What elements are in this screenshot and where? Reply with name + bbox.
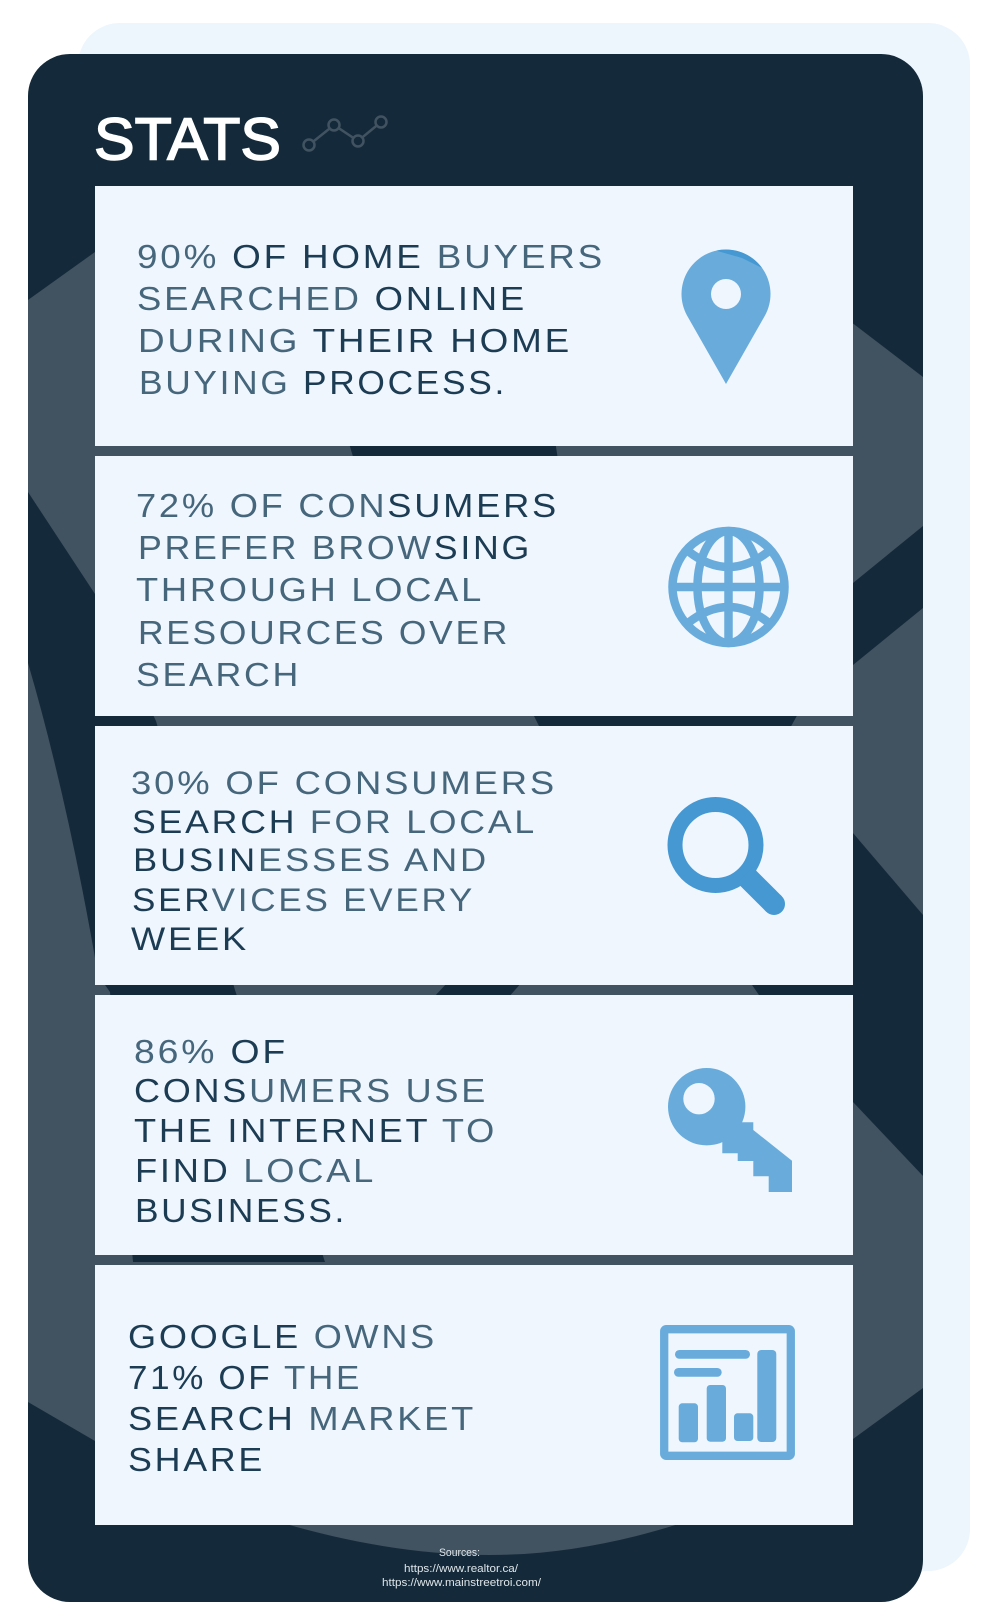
stat text: SEARCH (136, 656, 301, 693)
stat text: 90% OF HOME BUYERS (137, 238, 605, 275)
stat text: SEARCH FOR LOCAL (132, 804, 537, 840)
stat text: CONS UMERS USE (134, 1072, 488, 1109)
stat text (137, 238, 605, 401)
panel background (95, 1265, 853, 1525)
panel background (95, 726, 853, 985)
panel background (95, 995, 853, 1255)
icon: magnifying glass (675, 804, 780, 910)
stat text: BUYING PROCESS. (139, 364, 507, 401)
title: STATS (94, 106, 281, 172)
panel: google market share stat (95, 1265, 853, 1525)
panel: weekly search stat (95, 726, 853, 985)
stat text (136, 487, 559, 693)
stat text: 72% OF CON SUMERS (136, 487, 559, 524)
stat text: PREFER BROW SING (138, 529, 532, 566)
stat text: SEARCHED ONLINE (137, 280, 527, 317)
panel background (95, 456, 853, 716)
icon: line chart (304, 116, 386, 150)
stat text: WEEK (131, 921, 249, 957)
panel: home buyers stat (95, 186, 853, 446)
stat text: 30% OF CONSUMERS (131, 765, 557, 801)
stat text: THE INTERNET TO (134, 1112, 497, 1149)
stat text: SEARCH MARKET (128, 1400, 476, 1437)
panel: internet local business stat (95, 995, 853, 1255)
stat text: GOOGLE OWNS (128, 1318, 437, 1355)
sources text: https://www.mainstreetroi.com/ (382, 1577, 542, 1589)
icon: globe (672, 531, 785, 643)
panel: local resources stat (95, 456, 853, 716)
stat text: FIND LOCAL (135, 1152, 376, 1189)
stat text (128, 1318, 476, 1478)
icon: bar chart report (664, 1329, 791, 1456)
stat text: 86% OF (134, 1033, 288, 1070)
stat text: 71% OF THE (128, 1359, 362, 1396)
stat text: SERVICES EVERY (132, 882, 475, 918)
stat text: SHARE (128, 1441, 265, 1478)
sources text: Sources: (439, 1547, 480, 1559)
sources text: https://www.realtor.ca/ (404, 1563, 519, 1575)
panel background (95, 186, 853, 446)
icon: map pin (682, 249, 770, 384)
stat text: THROUGH LOCAL (136, 571, 484, 608)
stat text: DURING THEIR HOME (138, 322, 572, 359)
sources text (382, 1547, 542, 1589)
icon: key (668, 1068, 792, 1192)
stat text: BUSINESS. (135, 1192, 347, 1229)
stat text (131, 765, 557, 957)
stat text (134, 1033, 497, 1229)
stat text: BUSIN ESSES AND (133, 842, 489, 878)
stat text: RESOURCES OVER (138, 614, 510, 651)
